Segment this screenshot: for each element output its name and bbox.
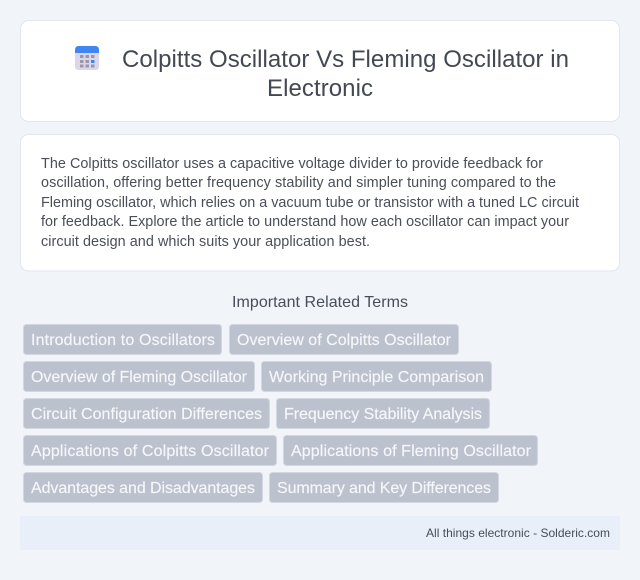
panel: summary card (20, 134, 620, 271)
text block: summary: Fleming oscillator, which relies on a vacuum tube or transistor with a tuned LC circuit (41, 195, 579, 211)
title: Colpitts Oscillator Vs Fleming Oscillator in (122, 46, 569, 73)
tag: overview colpitts (230, 324, 458, 354)
text block: summary: oscillation, offering better frequency stability and simpler tuning compared to the (41, 175, 556, 191)
tag: frequency stability (276, 398, 490, 428)
tag: advantages (24, 472, 262, 502)
tag: summary (270, 472, 498, 502)
tag: working principle: Working Principle Comparison (269, 369, 484, 386)
tag: overview fleming (24, 362, 254, 392)
icon: calendar (75, 46, 99, 70)
tag: overview fleming: Overview of Fleming Oscillator (31, 369, 248, 386)
heading: important related terms: Important Related Terms (232, 294, 408, 311)
text block: summary: The Colpitts oscillator uses a capacitive voltage divider to provide feedback for (41, 156, 543, 172)
tag: circuit configuration (24, 398, 270, 428)
tag: frequency stability: Frequency Stability Analysis (284, 406, 482, 423)
tag: introduction: Introduction to Oscillators (31, 332, 215, 349)
tag: overview colpitts: Overview of Colpitts Oscillator (237, 332, 452, 349)
title: Electronic (267, 75, 373, 102)
title (122, 46, 569, 102)
footer (20, 516, 620, 550)
text block: summary (41, 156, 579, 250)
panel: term tags (24, 324, 538, 502)
text block: summary: circuit design and which suits your application best. (41, 234, 370, 250)
tag: working principle (262, 362, 492, 392)
text block: summary: for feedback. Explore the article to understand how each oscillator can impact your (41, 214, 569, 230)
tag: applications fleming (284, 436, 538, 466)
tag: circuit configuration: Circuit Configuration Differences (31, 406, 262, 423)
tag: introduction (24, 324, 222, 354)
footer: All things electronic - Solderic.com (426, 526, 610, 540)
tag: advantages: Advantages and Disadvantages (31, 480, 255, 497)
tag: applications fleming: Applications of Fleming Oscillator (291, 443, 532, 460)
panel: title card (20, 20, 620, 122)
tag: summary: Summary and Key Differences (277, 480, 491, 497)
tag: applications colpitts (24, 436, 276, 466)
tag: applications colpitts: Applications of Colpitts Oscillator (31, 443, 270, 460)
